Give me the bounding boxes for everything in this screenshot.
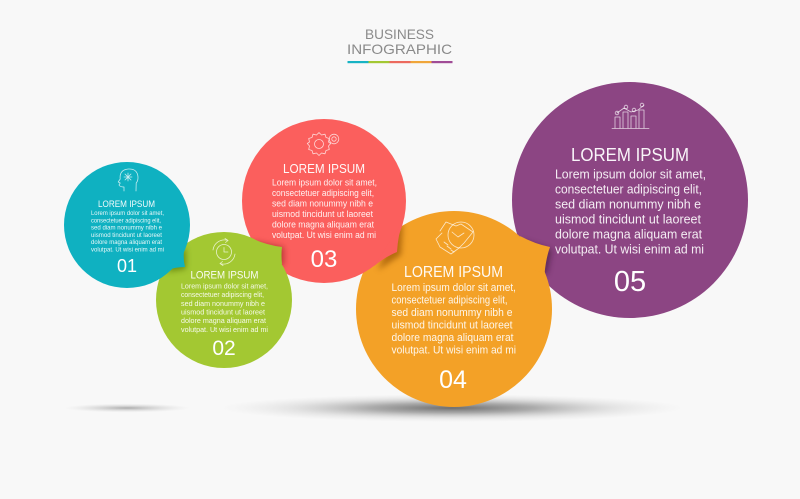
text block 03: volutpat. Ut wisi enim ad mi — [272, 230, 376, 240]
text block 01: volutpat. Ut wisi enim ad mi — [91, 246, 164, 254]
text block 04: sed diam nonummy nibh e — [392, 307, 513, 319]
heading 01: LOREM IPSUM — [98, 199, 155, 209]
text block 04: Lorem ipsum dolor sit amet, — [392, 282, 516, 294]
panel: step 02 — [156, 232, 292, 368]
text block 02: Lorem ipsum dolor sit amet, — [181, 282, 268, 290]
text block 03: dolore magna aliquam erat — [272, 220, 375, 230]
text block 05: volutpat. Ut wisi enim ad mi — [555, 242, 704, 256]
text block 02: consectetuer adipiscing elit, — [181, 290, 264, 299]
text block 01: dolore magna aliquam erat — [91, 239, 162, 246]
number 04: 04 — [439, 366, 467, 394]
text block 03: consectetuer adipiscing elit, — [272, 188, 374, 198]
text block 05 — [555, 166, 706, 256]
title: BUSINESS — [365, 26, 434, 42]
number 03: 03 — [311, 246, 337, 273]
circle 01 — [64, 162, 190, 288]
heading 04: LOREM IPSUM — [404, 264, 503, 281]
text block 01: Lorem ipsum dolor sit amet, — [91, 210, 164, 217]
circle 04 — [356, 211, 552, 407]
text block 04 — [392, 282, 516, 356]
heading 02: LOREM IPSUM — [190, 270, 259, 282]
tail 04 — [520, 236, 550, 274]
title: INFOGRAPHIC — [347, 41, 452, 57]
icon: clock — [213, 238, 235, 266]
tail shadow on 05 — [522, 240, 552, 274]
tail shadow on 04 — [378, 222, 403, 270]
icon: head — [118, 169, 138, 191]
number 01: 01 — [117, 256, 137, 276]
icon: bar chart — [612, 103, 649, 128]
text block 03: uismod tincidunt ut laoreet — [272, 209, 374, 219]
text block 03 — [272, 178, 377, 240]
tail 02 — [251, 238, 282, 264]
text block 01 — [91, 210, 164, 254]
panel: step 04 — [356, 211, 552, 407]
tail 01 — [167, 251, 185, 270]
text block 01: uismod tincidunt ut laoreet — [91, 232, 162, 239]
text block 02: volutpat. Ut wisi enim ad mi — [181, 325, 268, 334]
panel: step 05 — [512, 82, 748, 318]
tail shadow on 02 — [167, 248, 186, 272]
text block 01: consectetuer adipiscing elit, — [91, 217, 161, 224]
text block 05: consectetuer adipiscing elit, — [555, 182, 702, 196]
text block 01: sed diam nonummy nibh e — [91, 225, 163, 232]
panel: step 03 — [242, 119, 406, 283]
circle 02 — [156, 232, 292, 368]
text block 04: consectetuer adipiscing elit, — [392, 294, 508, 306]
icon: handshake — [436, 222, 474, 254]
heading 05: LOREM IPSUM — [571, 144, 689, 165]
text block 05: sed diam nonummy nibh e — [555, 196, 701, 212]
ground shadow: main — [220, 394, 684, 422]
text block 05: Lorem ipsum dolor sit amet, — [555, 166, 706, 182]
text block 04: uismod tincidunt ut laoreet — [392, 320, 513, 332]
text block 03: sed diam nonummy nibh e — [272, 198, 373, 208]
text block 05: dolore magna aliquam erat — [555, 226, 702, 242]
text block 04: volutpat. Ut wisi enim ad mi — [392, 344, 516, 356]
text block 02 — [181, 282, 268, 334]
tail shadow on 03 — [252, 241, 284, 266]
number 05: 05 — [614, 266, 646, 298]
text block 05: uismod tincidunt ut laoreet — [555, 212, 701, 226]
title colour rule — [348, 61, 452, 63]
text block 02: sed diam nonummy nibh e — [181, 299, 265, 308]
circle 03 — [242, 119, 406, 283]
circle 05 — [512, 82, 748, 318]
icon: gears — [307, 132, 339, 156]
number 02: 02 — [212, 337, 236, 360]
ground shadow: left — [64, 404, 190, 412]
title — [347, 26, 452, 57]
panel: step 01 — [64, 162, 190, 288]
text block 02: uismod tincidunt ut laoreet — [181, 308, 265, 316]
heading 03: LOREM IPSUM — [283, 161, 365, 176]
tail 03 — [374, 221, 403, 266]
text block 04: dolore magna aliquam erat — [392, 332, 514, 344]
text block 03: Lorem ipsum dolor sit amet, — [272, 178, 377, 188]
text block 02: dolore magna aliquam erat — [181, 316, 266, 325]
